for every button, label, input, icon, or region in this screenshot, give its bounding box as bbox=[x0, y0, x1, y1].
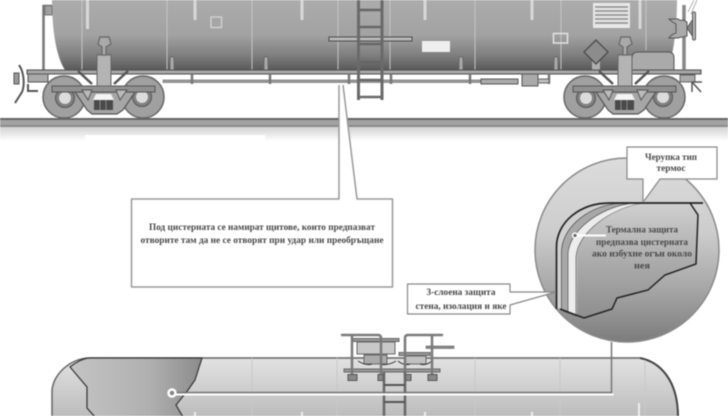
thermal protection text: нея bbox=[634, 262, 650, 272]
cutaway bbox=[70, 358, 202, 416]
pointer line bbox=[168, 342, 614, 396]
thermal pointer bbox=[573, 233, 606, 238]
break edge bbox=[560, 203, 698, 318]
right bogie bbox=[564, 37, 685, 118]
thermal protection text: Термална защита bbox=[606, 226, 678, 236]
callout: 3-layer protection: стена, изолация и яке bbox=[416, 302, 506, 312]
shell outline bbox=[556, 203, 703, 309]
tank body bbox=[52, 0, 677, 70]
thermal protection text: предпазва цистерната bbox=[596, 238, 688, 248]
hazard placard bbox=[584, 40, 608, 70]
thermal protection text: ако избухне огън около bbox=[592, 248, 692, 260]
lower tank cross-section bbox=[52, 335, 678, 416]
callout: thermos shell: термос bbox=[656, 164, 686, 174]
seams bbox=[82, 0, 646, 70]
seams bbox=[252, 358, 645, 416]
tank markings bbox=[88, 0, 640, 29]
callout: 3-layer protection bbox=[408, 284, 556, 314]
callout: 3-layer protection: 3-слоена защита bbox=[426, 288, 496, 298]
callout: shields under the tank: отворите там да не се отворят при удар или преобръщане bbox=[140, 235, 384, 246]
tank shell bbox=[52, 358, 678, 416]
magnified circle detail bbox=[535, 158, 719, 342]
left bogie bbox=[43, 37, 164, 118]
louver panel bbox=[593, 3, 630, 28]
rail track bbox=[0, 118, 728, 143]
callout: shields under the tank bbox=[132, 85, 392, 287]
under pipe bbox=[163, 74, 549, 86]
horizontal grab bar bbox=[329, 37, 412, 41]
callout: thermos shell: Черупка тип bbox=[645, 153, 697, 163]
tank car bbox=[14, 0, 702, 118]
right end hand brake bbox=[669, 0, 702, 92]
dome box bbox=[632, 52, 674, 70]
left coupler bbox=[14, 65, 48, 103]
deck bbox=[27, 70, 701, 74]
left end rod bbox=[44, 6, 52, 70]
callout: thermos shell bbox=[627, 147, 717, 202]
wall layers bbox=[557, 203, 698, 318]
callout: shields under the tank: Под цистерната се намират щитове, които предпазват bbox=[149, 223, 375, 233]
thermal protection text bbox=[592, 226, 692, 272]
bumps bbox=[170, 56, 558, 70]
platform and fittings bbox=[341, 335, 454, 416]
ladder bbox=[358, 0, 382, 100]
